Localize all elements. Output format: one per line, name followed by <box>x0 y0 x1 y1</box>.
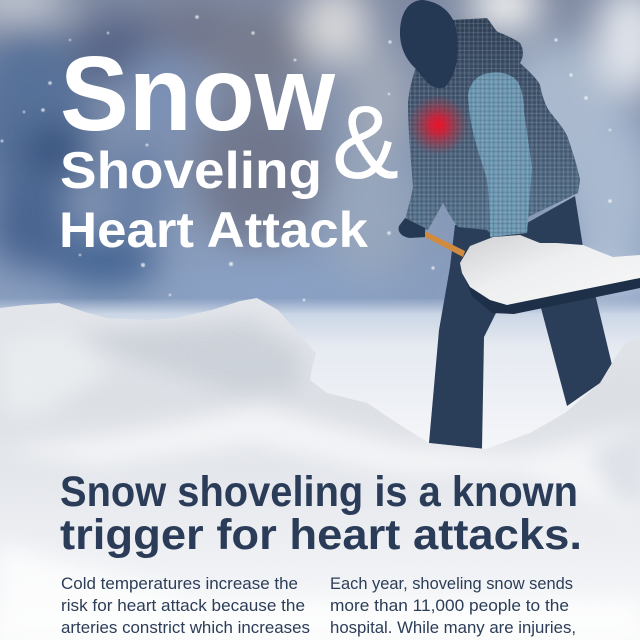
snowy field behind figure <box>0 298 640 460</box>
shovel handle <box>425 231 465 257</box>
left body column: arteries constrict which increases <box>61 619 310 637</box>
right leg <box>520 196 612 406</box>
ampersand: & <box>332 85 399 201</box>
blurred winter sky background <box>0 0 640 325</box>
right body column: Each year, shoveling snow sends <box>330 575 573 593</box>
snow on shovel <box>460 235 640 305</box>
light sleeve <box>468 72 532 237</box>
head <box>400 0 458 88</box>
heart pain glow <box>407 94 469 156</box>
shovel blade <box>461 268 640 314</box>
snow shadow shading <box>4 318 601 606</box>
main snow mass <box>0 298 640 606</box>
right body column: more than 11,000 people to the <box>330 597 569 615</box>
title words: Heart Attack: Heart Attack <box>59 202 368 258</box>
snow bank foreground <box>0 298 640 606</box>
snow grain texture <box>97 320 607 446</box>
main heading <box>60 468 582 559</box>
heading line two: trigger for heart attacks. <box>60 511 582 559</box>
right body column: hospital. While many are injuries, <box>330 619 576 637</box>
left body column: Cold temperatures increase the <box>61 575 298 593</box>
jacket <box>405 18 580 233</box>
title <box>59 35 399 258</box>
shoveling figure <box>399 0 640 449</box>
right body column <box>330 575 576 637</box>
falling snow specks <box>1 15 612 301</box>
left leg <box>429 225 530 449</box>
left body column <box>61 575 310 637</box>
left body column: risk for heart attack because the <box>61 597 305 615</box>
title word: Shoveling: Shoveling <box>60 142 322 200</box>
heading line one: Snow shoveling is a known <box>60 468 578 516</box>
glove <box>399 218 426 238</box>
title word: Snow: Snow <box>60 35 336 153</box>
